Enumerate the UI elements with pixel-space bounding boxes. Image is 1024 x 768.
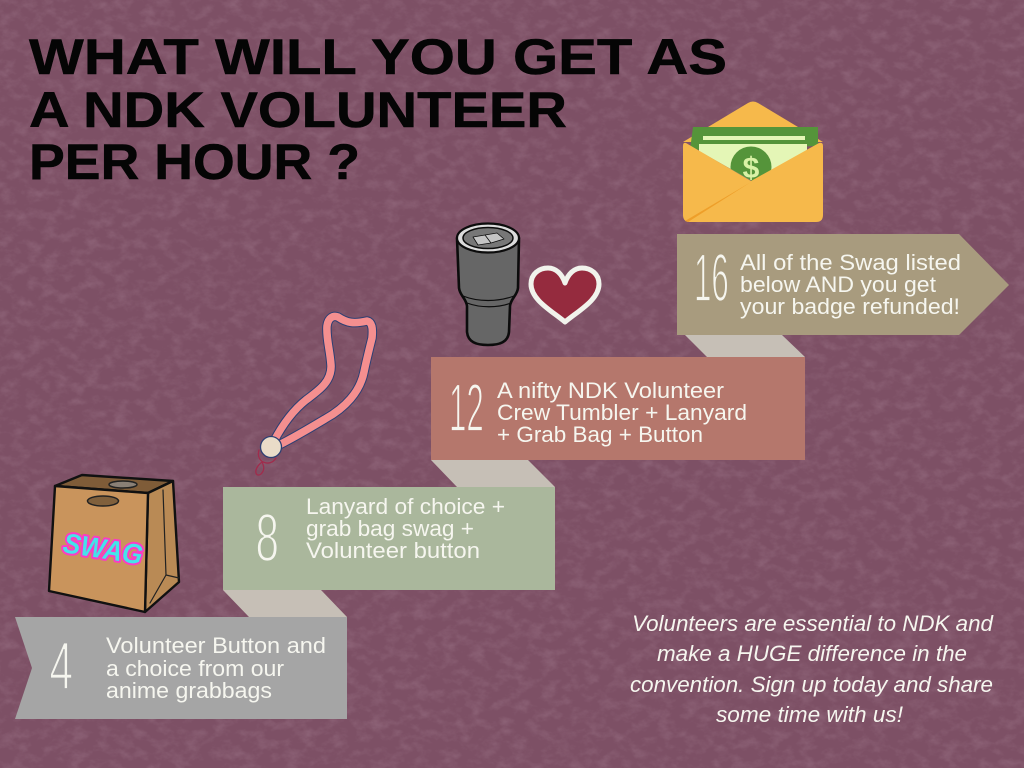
connector fold: 4 to 8 [223,590,347,617]
title [29,29,727,190]
description: below AND you get [740,272,936,297]
connector fold: 8 to 12 [431,460,555,487]
description: a choice from our [106,656,284,681]
description [106,633,326,703]
description: + Grab Bag + Button [497,422,703,447]
closing message: make a HUGE difference in the [657,641,967,666]
icon: tumbler [457,224,519,345]
hour number 12: 12 [449,371,484,446]
panel: 4 hours [15,617,347,719]
description: A nifty NDK Volunteer [497,378,724,403]
description: Volunteer button [306,538,480,563]
panel: 8 hours [223,487,555,590]
connector fold: 12 to 16 [685,335,805,357]
description: grab bag swag + [306,516,474,541]
hour number 4: 4 [50,628,73,703]
description [306,494,505,563]
description: Lanyard of choice + [306,494,505,519]
closing message: convention. Sign up today and share [630,672,993,697]
description [497,378,747,447]
icon: swag bag [49,475,179,612]
closing message [630,611,994,727]
icon: heart [531,268,599,322]
title: WHAT WILL YOU GET AS [29,29,727,85]
panel: 16 hours [677,234,1009,335]
description [740,250,961,319]
swag label: SWAG [61,527,145,570]
description: your badge refunded! [740,294,960,319]
title: PER HOUR ? [29,134,360,190]
description: anime grabbags [106,678,272,703]
description: All of the Swag listed [740,250,961,275]
description: Crew Tumbler + Lanyard [497,400,747,425]
title: A NDK VOLUNTEER [29,82,567,138]
closing message: some time with us! [716,702,903,727]
description: Volunteer Button and [106,633,326,658]
hour number 8: 8 [256,500,279,575]
hour number 16: 16 [694,241,729,316]
icon: lanyard [256,316,372,475]
panel: 12 hours [431,357,805,460]
banknote: $ [743,152,760,185]
icon: money envelope [683,102,823,222]
closing message: Volunteers are essential to NDK and [632,611,994,636]
